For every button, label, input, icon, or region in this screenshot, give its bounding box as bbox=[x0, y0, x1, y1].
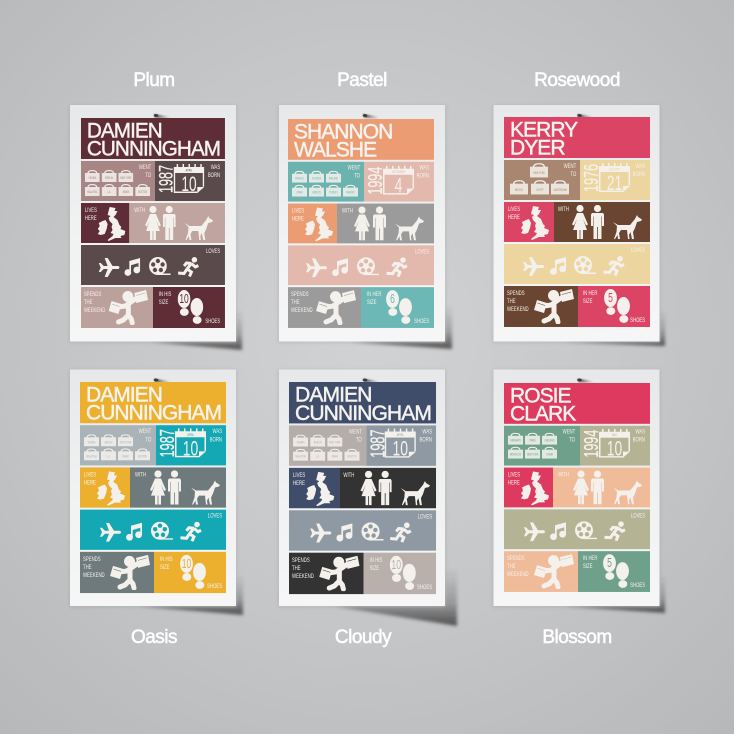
title block: CUNNINGHAM bbox=[295, 402, 431, 425]
shoe size panel: IN HER bbox=[367, 291, 382, 298]
went to panel: FRANCE bbox=[295, 176, 304, 181]
paper sheet with pin bbox=[69, 105, 237, 343]
poster: Cloudy bbox=[278, 370, 457, 626]
poster: Rosewood bbox=[492, 105, 665, 346]
paper shadow bbox=[565, 575, 665, 613]
weekend panel: SPENDS bbox=[291, 291, 309, 298]
shoe size panel: SIZE bbox=[583, 298, 593, 305]
lives here panel: LIVES bbox=[508, 472, 520, 479]
shoe size panel: IN HIS bbox=[160, 556, 173, 563]
was born panel: 10 bbox=[607, 437, 622, 460]
shoe size panel: SHOES bbox=[414, 318, 429, 325]
lives here panel: LIVES bbox=[85, 207, 97, 214]
weekend panel: THE bbox=[84, 299, 93, 306]
label: Oasis: Oasis bbox=[131, 627, 177, 648]
poster content bbox=[288, 119, 434, 328]
weekend panel: WEEKEND bbox=[292, 573, 314, 580]
shoe size panel: 10 bbox=[391, 558, 401, 572]
went to panel: BOSTON bbox=[138, 454, 147, 459]
label: Pastel: Pastel bbox=[337, 70, 387, 91]
lives here panel bbox=[504, 202, 554, 242]
went to panel: NEW YORK bbox=[533, 170, 545, 175]
went to panel: AMSTERDAM bbox=[553, 187, 567, 192]
was born panel: APRIL bbox=[397, 432, 404, 437]
label: Rosewood: Rosewood bbox=[534, 70, 620, 91]
weekend panel: SPENDS bbox=[507, 290, 525, 297]
was born panel: WAS bbox=[211, 164, 220, 171]
title block: CUNNINGHAM bbox=[86, 402, 221, 425]
went to panel bbox=[80, 425, 156, 465]
poster: Pastel bbox=[278, 105, 452, 349]
shoe size panel: 5 bbox=[608, 291, 613, 306]
title block bbox=[289, 382, 436, 425]
was born panel bbox=[156, 425, 226, 465]
went to panel: L.A. bbox=[316, 454, 320, 459]
shoe size panel bbox=[153, 287, 225, 328]
went to panel: VIENNA bbox=[89, 175, 96, 180]
label: Blossom: Blossom bbox=[542, 627, 612, 648]
went to panel: CHICAGO bbox=[545, 438, 554, 443]
went to panel bbox=[289, 425, 367, 466]
shoe size panel: SHOES bbox=[630, 317, 645, 324]
was born panel: BORN bbox=[633, 171, 645, 178]
went to panel: WENT bbox=[563, 429, 576, 436]
went to panel: WENT bbox=[349, 429, 362, 436]
shoe size panel: IN HIS bbox=[370, 557, 382, 564]
weekend panel bbox=[504, 286, 578, 327]
went to panel: TURKEY bbox=[329, 190, 338, 195]
went to panel: NEW YORK bbox=[527, 452, 538, 457]
title block: SHANNON bbox=[294, 120, 392, 143]
title block: ROSIE bbox=[510, 384, 572, 407]
title block bbox=[81, 118, 225, 161]
with panel: WITH bbox=[558, 206, 569, 213]
shoe size panel bbox=[154, 552, 226, 593]
loves panel: LOVES bbox=[206, 248, 220, 255]
went to panel: VIENNA bbox=[297, 440, 305, 445]
went to panel: MEXICO bbox=[515, 187, 523, 192]
was born panel: BORN bbox=[633, 437, 645, 444]
shoe size panel: 10 bbox=[182, 557, 191, 571]
lives here panel: LIVES bbox=[84, 472, 96, 479]
weekend panel: THE bbox=[292, 565, 301, 572]
shoe size panel: SHOES bbox=[207, 583, 222, 590]
weekend panel bbox=[288, 287, 361, 328]
went to panel: WENT bbox=[348, 165, 361, 172]
shoe size panel: SHOES bbox=[205, 318, 220, 325]
loves panel: LOVES bbox=[418, 514, 432, 521]
label: Plum: Plum bbox=[133, 70, 175, 91]
went to panel: VIENNA bbox=[88, 440, 96, 444]
went to panel: TO bbox=[145, 437, 152, 444]
was born panel: 1994 bbox=[581, 430, 603, 458]
paper shadow bbox=[150, 310, 242, 350]
went to panel bbox=[504, 426, 580, 466]
shoe size panel bbox=[361, 287, 434, 328]
with panel: WITH bbox=[342, 208, 353, 215]
weekend panel: WEEKEND bbox=[84, 307, 105, 314]
went to panel: NEW YORK bbox=[120, 175, 132, 180]
was born panel bbox=[367, 425, 436, 466]
weekend panel: THE bbox=[507, 563, 516, 570]
shoe size panel: SHOES bbox=[630, 582, 645, 589]
was born panel: APRIL bbox=[187, 432, 194, 437]
loves panel: LOVES bbox=[208, 513, 222, 520]
weekend panel: WEEKEND bbox=[507, 571, 529, 578]
was born panel: 10 bbox=[181, 172, 197, 196]
shoe size panel: SIZE bbox=[159, 299, 169, 306]
was born panel: BORN bbox=[417, 173, 429, 180]
poster content bbox=[81, 118, 225, 328]
went to panel bbox=[504, 160, 580, 200]
with panel bbox=[337, 204, 434, 243]
poster content bbox=[504, 117, 650, 327]
weekend panel: SPENDS bbox=[292, 557, 310, 564]
poster: Plum bbox=[69, 105, 242, 350]
was born panel: WAS bbox=[213, 429, 222, 436]
was born panel: 10 bbox=[393, 437, 408, 460]
shoe size panel: SIZE bbox=[367, 299, 377, 306]
went to panel: MIAMI bbox=[122, 454, 129, 459]
title block: DAMIEN bbox=[295, 384, 371, 407]
shoe size panel: 5 bbox=[607, 556, 612, 571]
went to panel: EGYPT bbox=[536, 187, 544, 192]
shoe size panel: IN HER bbox=[583, 290, 598, 297]
paper sheet with pin bbox=[492, 370, 660, 608]
loves panel bbox=[504, 509, 650, 549]
with panel: WITH bbox=[134, 207, 145, 214]
lives here panel: HERE bbox=[293, 480, 305, 487]
with panel: WITH bbox=[558, 472, 569, 479]
weekend panel bbox=[81, 287, 153, 328]
with panel bbox=[339, 468, 436, 508]
went to panel: TO bbox=[354, 173, 360, 180]
paper shadow bbox=[140, 575, 243, 615]
weekend panel: SPENDS bbox=[83, 556, 101, 563]
label: Cloudy: Cloudy bbox=[335, 627, 392, 648]
poster: Blossom bbox=[492, 370, 665, 613]
was born panel: 1987 bbox=[157, 429, 179, 457]
title block: KERRY bbox=[510, 118, 578, 142]
poster content bbox=[80, 382, 226, 593]
was born panel: 1987 bbox=[368, 429, 390, 458]
was born panel: WAS bbox=[422, 429, 432, 436]
was born panel: BORN bbox=[208, 172, 220, 179]
shoe size panel: SIZE bbox=[370, 565, 379, 572]
weekend panel bbox=[504, 551, 578, 592]
title block: DAMIEN bbox=[87, 119, 162, 143]
was born panel: APRIL bbox=[186, 168, 193, 173]
went to panel: MALAYSIA bbox=[86, 454, 97, 459]
title block: DYER bbox=[510, 136, 565, 160]
weekend panel: WEEKEND bbox=[291, 307, 313, 314]
title block bbox=[504, 383, 650, 425]
was born panel: BORN bbox=[420, 437, 432, 444]
lives here panel: LIVES bbox=[293, 472, 305, 479]
went to panel bbox=[288, 162, 364, 202]
was born panel: 1976 bbox=[581, 164, 603, 192]
went to panel: L.A. bbox=[107, 454, 111, 459]
went to panel: MOROCCO bbox=[510, 452, 521, 457]
title block: WALSHE bbox=[294, 138, 377, 161]
went to panel: BOSTON bbox=[138, 189, 147, 194]
went to panel: GERMANY bbox=[510, 438, 521, 443]
lives here panel bbox=[504, 468, 553, 507]
went to panel: TO bbox=[569, 437, 575, 444]
was born panel bbox=[580, 160, 650, 200]
shoe size panel bbox=[578, 286, 650, 327]
with panel: WITH bbox=[135, 472, 146, 479]
shoe size panel: SIZE bbox=[160, 564, 170, 571]
went to panel: MALAYSIA bbox=[87, 189, 98, 194]
lives here panel: HERE bbox=[508, 214, 520, 221]
was born panel: 21 bbox=[607, 171, 622, 195]
with panel bbox=[130, 467, 226, 508]
loves panel bbox=[504, 244, 650, 284]
weekend panel: THE bbox=[83, 564, 92, 571]
weekend panel: WEEKEND bbox=[507, 306, 529, 313]
was born panel bbox=[580, 426, 650, 466]
shoe size panel bbox=[364, 553, 436, 594]
lives here panel: HERE bbox=[85, 215, 97, 222]
title block bbox=[504, 117, 650, 160]
went to panel: PARIS bbox=[529, 438, 536, 443]
went to panel: TO bbox=[356, 437, 362, 444]
weekend panel: WEEKEND bbox=[83, 572, 105, 579]
went to panel: IRELAND bbox=[329, 176, 338, 181]
lives here panel: HERE bbox=[84, 480, 96, 487]
paper sheet with pin bbox=[278, 370, 446, 608]
paper shadow bbox=[350, 305, 452, 349]
with panel bbox=[553, 468, 650, 507]
shoe size panel bbox=[578, 551, 650, 592]
weekend panel: SPENDS bbox=[507, 555, 525, 562]
weekend panel: SPENDS bbox=[84, 291, 102, 298]
went to panel: MIAMI bbox=[332, 454, 338, 459]
went to panel: MADRID bbox=[346, 190, 355, 195]
went to panel: MIAMI bbox=[123, 189, 129, 194]
loves panel: LOVES bbox=[415, 249, 429, 256]
was born panel: MAY bbox=[612, 433, 617, 437]
was born panel: WAS bbox=[420, 165, 429, 172]
paper sheet with pin bbox=[69, 370, 237, 608]
title block: CUNNINGHAM bbox=[87, 137, 220, 161]
paper sheet with pin bbox=[278, 105, 446, 343]
with panel bbox=[554, 202, 650, 242]
title block: CLARK bbox=[510, 402, 576, 425]
loves panel bbox=[289, 510, 436, 551]
was born panel: BORN bbox=[210, 437, 222, 444]
went to panel: BERLIN bbox=[314, 440, 322, 445]
poster content bbox=[289, 382, 436, 594]
shoe size panel: IN HER bbox=[583, 555, 598, 562]
title block: DAMIEN bbox=[86, 384, 162, 407]
went to panel: NEW YORK bbox=[329, 440, 341, 445]
weekend panel bbox=[80, 552, 154, 593]
went to panel: SPAIN bbox=[296, 190, 303, 195]
went to panel: TO bbox=[570, 171, 577, 178]
lives here panel: HERE bbox=[292, 216, 304, 223]
shoe size panel: SIZE bbox=[583, 563, 593, 570]
went to panel: BERLIN bbox=[105, 440, 112, 444]
went to panel: FLORIDA bbox=[312, 176, 321, 181]
shoe size panel: 10 bbox=[179, 292, 189, 307]
was born panel: 4 bbox=[395, 174, 402, 197]
paper sheet with pin bbox=[492, 105, 660, 343]
paper shadow bbox=[335, 568, 457, 626]
lives here panel: HERE bbox=[508, 480, 520, 487]
went to panel: CHINA bbox=[546, 452, 553, 457]
went to panel: MALAYSIA bbox=[295, 454, 306, 459]
went to panel bbox=[81, 161, 155, 201]
was born panel: WAS bbox=[636, 429, 645, 436]
lives here panel bbox=[81, 203, 129, 243]
went to panel: WENT bbox=[564, 163, 577, 170]
went to panel: GREECE bbox=[312, 190, 321, 195]
loves panel bbox=[81, 245, 225, 285]
was born panel: WAS bbox=[636, 163, 645, 170]
was born panel bbox=[155, 161, 225, 201]
loves panel bbox=[80, 510, 226, 550]
loves panel: LOVES bbox=[631, 247, 645, 254]
was born panel: 1994 bbox=[365, 167, 387, 195]
lives here panel bbox=[289, 468, 339, 508]
weekend panel: THE bbox=[291, 299, 300, 306]
was born panel: 10 bbox=[183, 436, 198, 460]
was born panel: 1987 bbox=[156, 165, 178, 193]
poster content bbox=[504, 383, 650, 592]
was born panel: DECEMBER bbox=[392, 170, 406, 174]
went to panel: WENT bbox=[139, 429, 152, 436]
was born panel bbox=[364, 162, 434, 202]
went to panel: BOSTON bbox=[347, 454, 356, 459]
loves panel bbox=[288, 245, 434, 285]
shoe size panel: 6 bbox=[390, 292, 395, 307]
was born panel: JANUARY bbox=[609, 167, 620, 172]
paper shadow bbox=[565, 310, 665, 346]
shoe size panel: SHOES bbox=[417, 584, 432, 591]
lives here panel: LIVES bbox=[508, 206, 520, 213]
went to panel: NEW YORK bbox=[120, 440, 131, 444]
shoe size panel: IN HIS bbox=[159, 291, 172, 298]
loves panel: LOVES bbox=[631, 513, 645, 520]
went to panel: TO bbox=[145, 172, 151, 179]
title block bbox=[80, 382, 226, 425]
lives here panel bbox=[288, 204, 337, 243]
weekend panel bbox=[289, 553, 364, 594]
went to panel: WENT bbox=[139, 164, 152, 171]
lives here panel bbox=[80, 467, 130, 508]
went to panel: BERLIN bbox=[105, 175, 113, 180]
with panel bbox=[129, 203, 225, 243]
went to panel: L.A. bbox=[107, 189, 111, 194]
poster: Oasis bbox=[69, 370, 243, 615]
weekend panel: THE bbox=[507, 298, 516, 305]
with panel: WITH bbox=[343, 472, 354, 479]
lives here panel: LIVES bbox=[292, 208, 304, 215]
title block bbox=[288, 119, 434, 161]
